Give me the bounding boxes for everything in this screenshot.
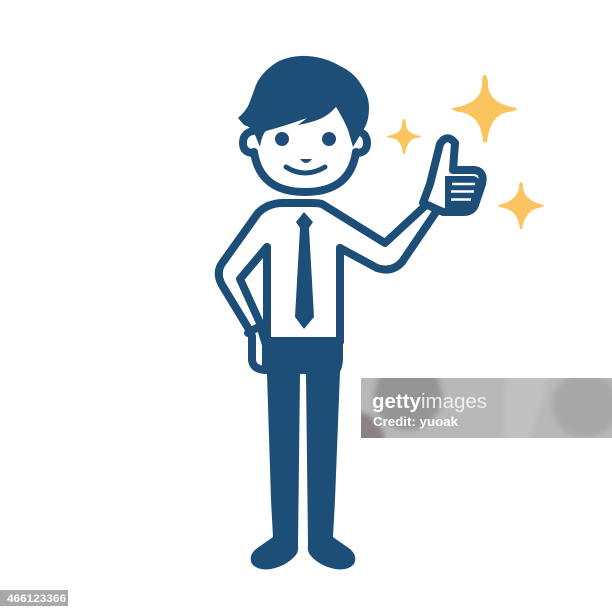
icon: head outline and ears	[243, 131, 367, 192]
icon: shirt outline and raised arm	[219, 203, 436, 370]
watermark text: credit: Credit: yuoak	[373, 415, 458, 429]
icon: smile	[286, 167, 325, 173]
icon: small sparkle	[387, 119, 421, 154]
icon: eyes	[275, 132, 336, 146]
icon: legs and feet	[251, 337, 355, 569]
icon: thumbs-up hand	[423, 138, 483, 212]
image id tag	[0, 590, 68, 606]
figure: businessman	[219, 56, 483, 569]
id number: 466123366	[7, 593, 66, 605]
watermark: getty images banner	[361, 378, 612, 438]
icon: large sparkle	[452, 75, 517, 142]
icon: right sparkle	[498, 182, 544, 229]
icon: nose	[300, 159, 312, 163]
icon: necktie	[295, 212, 314, 329]
icon: hair	[238, 56, 369, 147]
watermark text: gettyimages: gettyimages	[372, 391, 487, 413]
